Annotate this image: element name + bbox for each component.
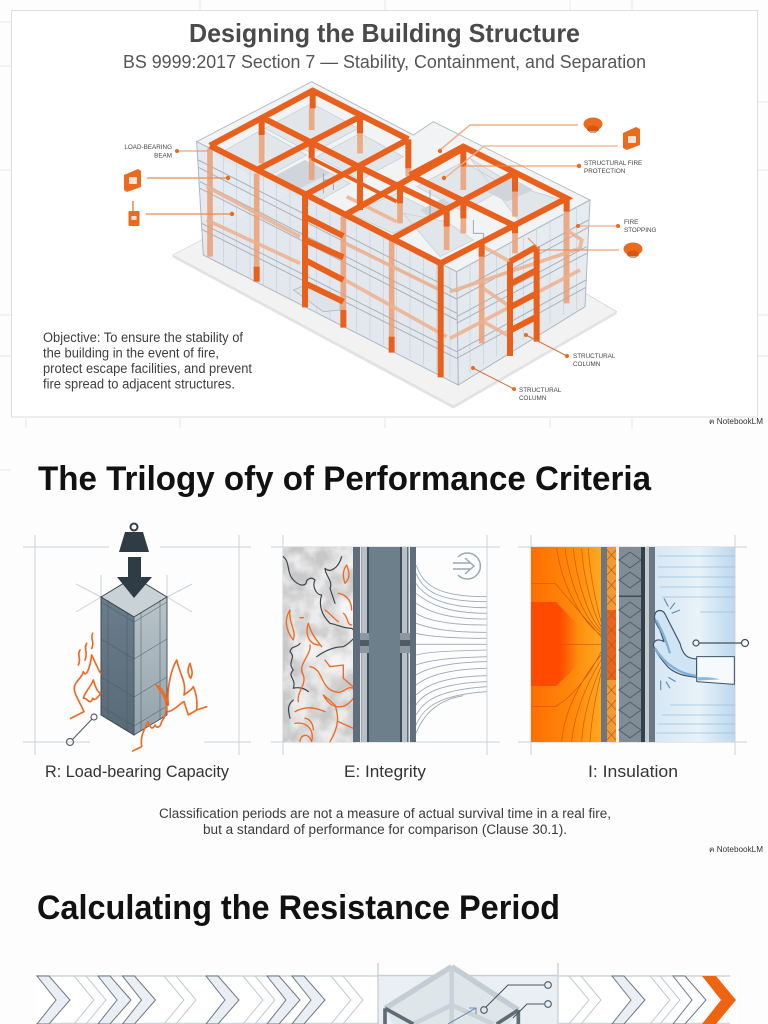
callout: structural column front bbox=[471, 366, 562, 402]
icon: smoke detector top bbox=[438, 118, 602, 153]
cool side bbox=[655, 547, 735, 742]
column bbox=[101, 577, 167, 735]
subtitle: BS 9999:2017 Section 7 — Stability, Containment, and Separation bbox=[123, 52, 646, 72]
callout lines bbox=[448, 982, 551, 1024]
objective text: protect escape facilities, and prevent bbox=[43, 361, 252, 376]
objective text: fire spread to adjacent structures. bbox=[43, 376, 235, 392]
icon: smoke detector right bbox=[528, 238, 642, 258]
objective text bbox=[43, 330, 252, 392]
callout: fire stopping bbox=[576, 219, 657, 234]
callout: structural fire protection: STRUCTURAL FIRE bbox=[584, 160, 642, 167]
callout: load-bearing beam: LOAD-BEARING bbox=[124, 144, 172, 151]
icon: weight bbox=[119, 524, 149, 552]
callout: structural fire protection bbox=[464, 160, 642, 175]
callout: fire stopping: FIRE bbox=[624, 219, 638, 226]
callout: structural column front: STRUCTURAL bbox=[519, 387, 562, 394]
classification note: but a standard of performance for comparison (Clause 30.1). bbox=[203, 822, 567, 837]
strong chevrons bbox=[37, 976, 706, 1024]
connector bbox=[66, 714, 97, 746]
icon: alarm panel right bbox=[442, 127, 640, 180]
connector bbox=[693, 640, 748, 646]
wall layers bbox=[601, 547, 655, 742]
callout: load-bearing beam: BEAM bbox=[154, 152, 172, 160]
icon: hand bbox=[653, 598, 734, 690]
icon: alarm panel left bbox=[124, 169, 230, 192]
heading: resistance period: Calculating the Resistance Period bbox=[37, 889, 560, 927]
callout: structural column right bbox=[524, 333, 616, 368]
flames bbox=[71, 633, 207, 751]
logo: NotebookLM middle: ฅ NotebookLM bbox=[709, 845, 763, 854]
objective text: Objective: To ensure the stability of bbox=[43, 330, 243, 345]
icon: call point left bbox=[128, 201, 234, 226]
logo: NotebookLM top: ฅ NotebookLM bbox=[709, 417, 763, 426]
heading: trilogy: The Trilogy ofy of Performance Criteria bbox=[38, 460, 652, 498]
icon: down arrow bbox=[117, 557, 152, 598]
title: Designing the Building Structure bbox=[189, 18, 580, 48]
label: E: E: Integrity bbox=[344, 762, 426, 781]
label: I: I: Insulation bbox=[588, 762, 678, 781]
classification note: Classification periods are not a measure of actual survival time in a real fire, bbox=[159, 806, 611, 821]
panel: building structure bbox=[12, 10, 758, 417]
panel: I insulation bbox=[518, 535, 748, 755]
label: R: R: Load-bearing Capacity bbox=[45, 762, 229, 781]
chevron process strip bbox=[36, 976, 738, 1024]
building illustration bbox=[173, 82, 617, 409]
air flow lines bbox=[416, 565, 487, 733]
callout: structural column front: COLUMN bbox=[519, 395, 547, 402]
icon: arrow in circle bbox=[453, 553, 480, 579]
faint chevrons bbox=[74, 976, 680, 1024]
panel: E integrity bbox=[271, 535, 500, 755]
callout: load-bearing beam bbox=[124, 144, 208, 160]
panel: test frame illustration bbox=[378, 963, 558, 1024]
smoke outlines and flames bbox=[283, 557, 362, 742]
wall section bbox=[353, 547, 416, 742]
classification note bbox=[159, 806, 611, 837]
callout: structural column right: STRUCTURAL bbox=[573, 353, 616, 360]
callout: structural column right: COLUMN bbox=[573, 361, 601, 368]
hot side bbox=[531, 547, 602, 742]
panel: R load-bearing capacity bbox=[23, 524, 251, 755]
callout: fire stopping: STOPPING bbox=[624, 227, 657, 234]
objective text: the building in the event of fire, bbox=[43, 346, 219, 360]
orange chevron bbox=[702, 976, 736, 1024]
callout: structural fire protection: PROTECTION bbox=[584, 168, 626, 175]
smoke bbox=[283, 547, 357, 742]
